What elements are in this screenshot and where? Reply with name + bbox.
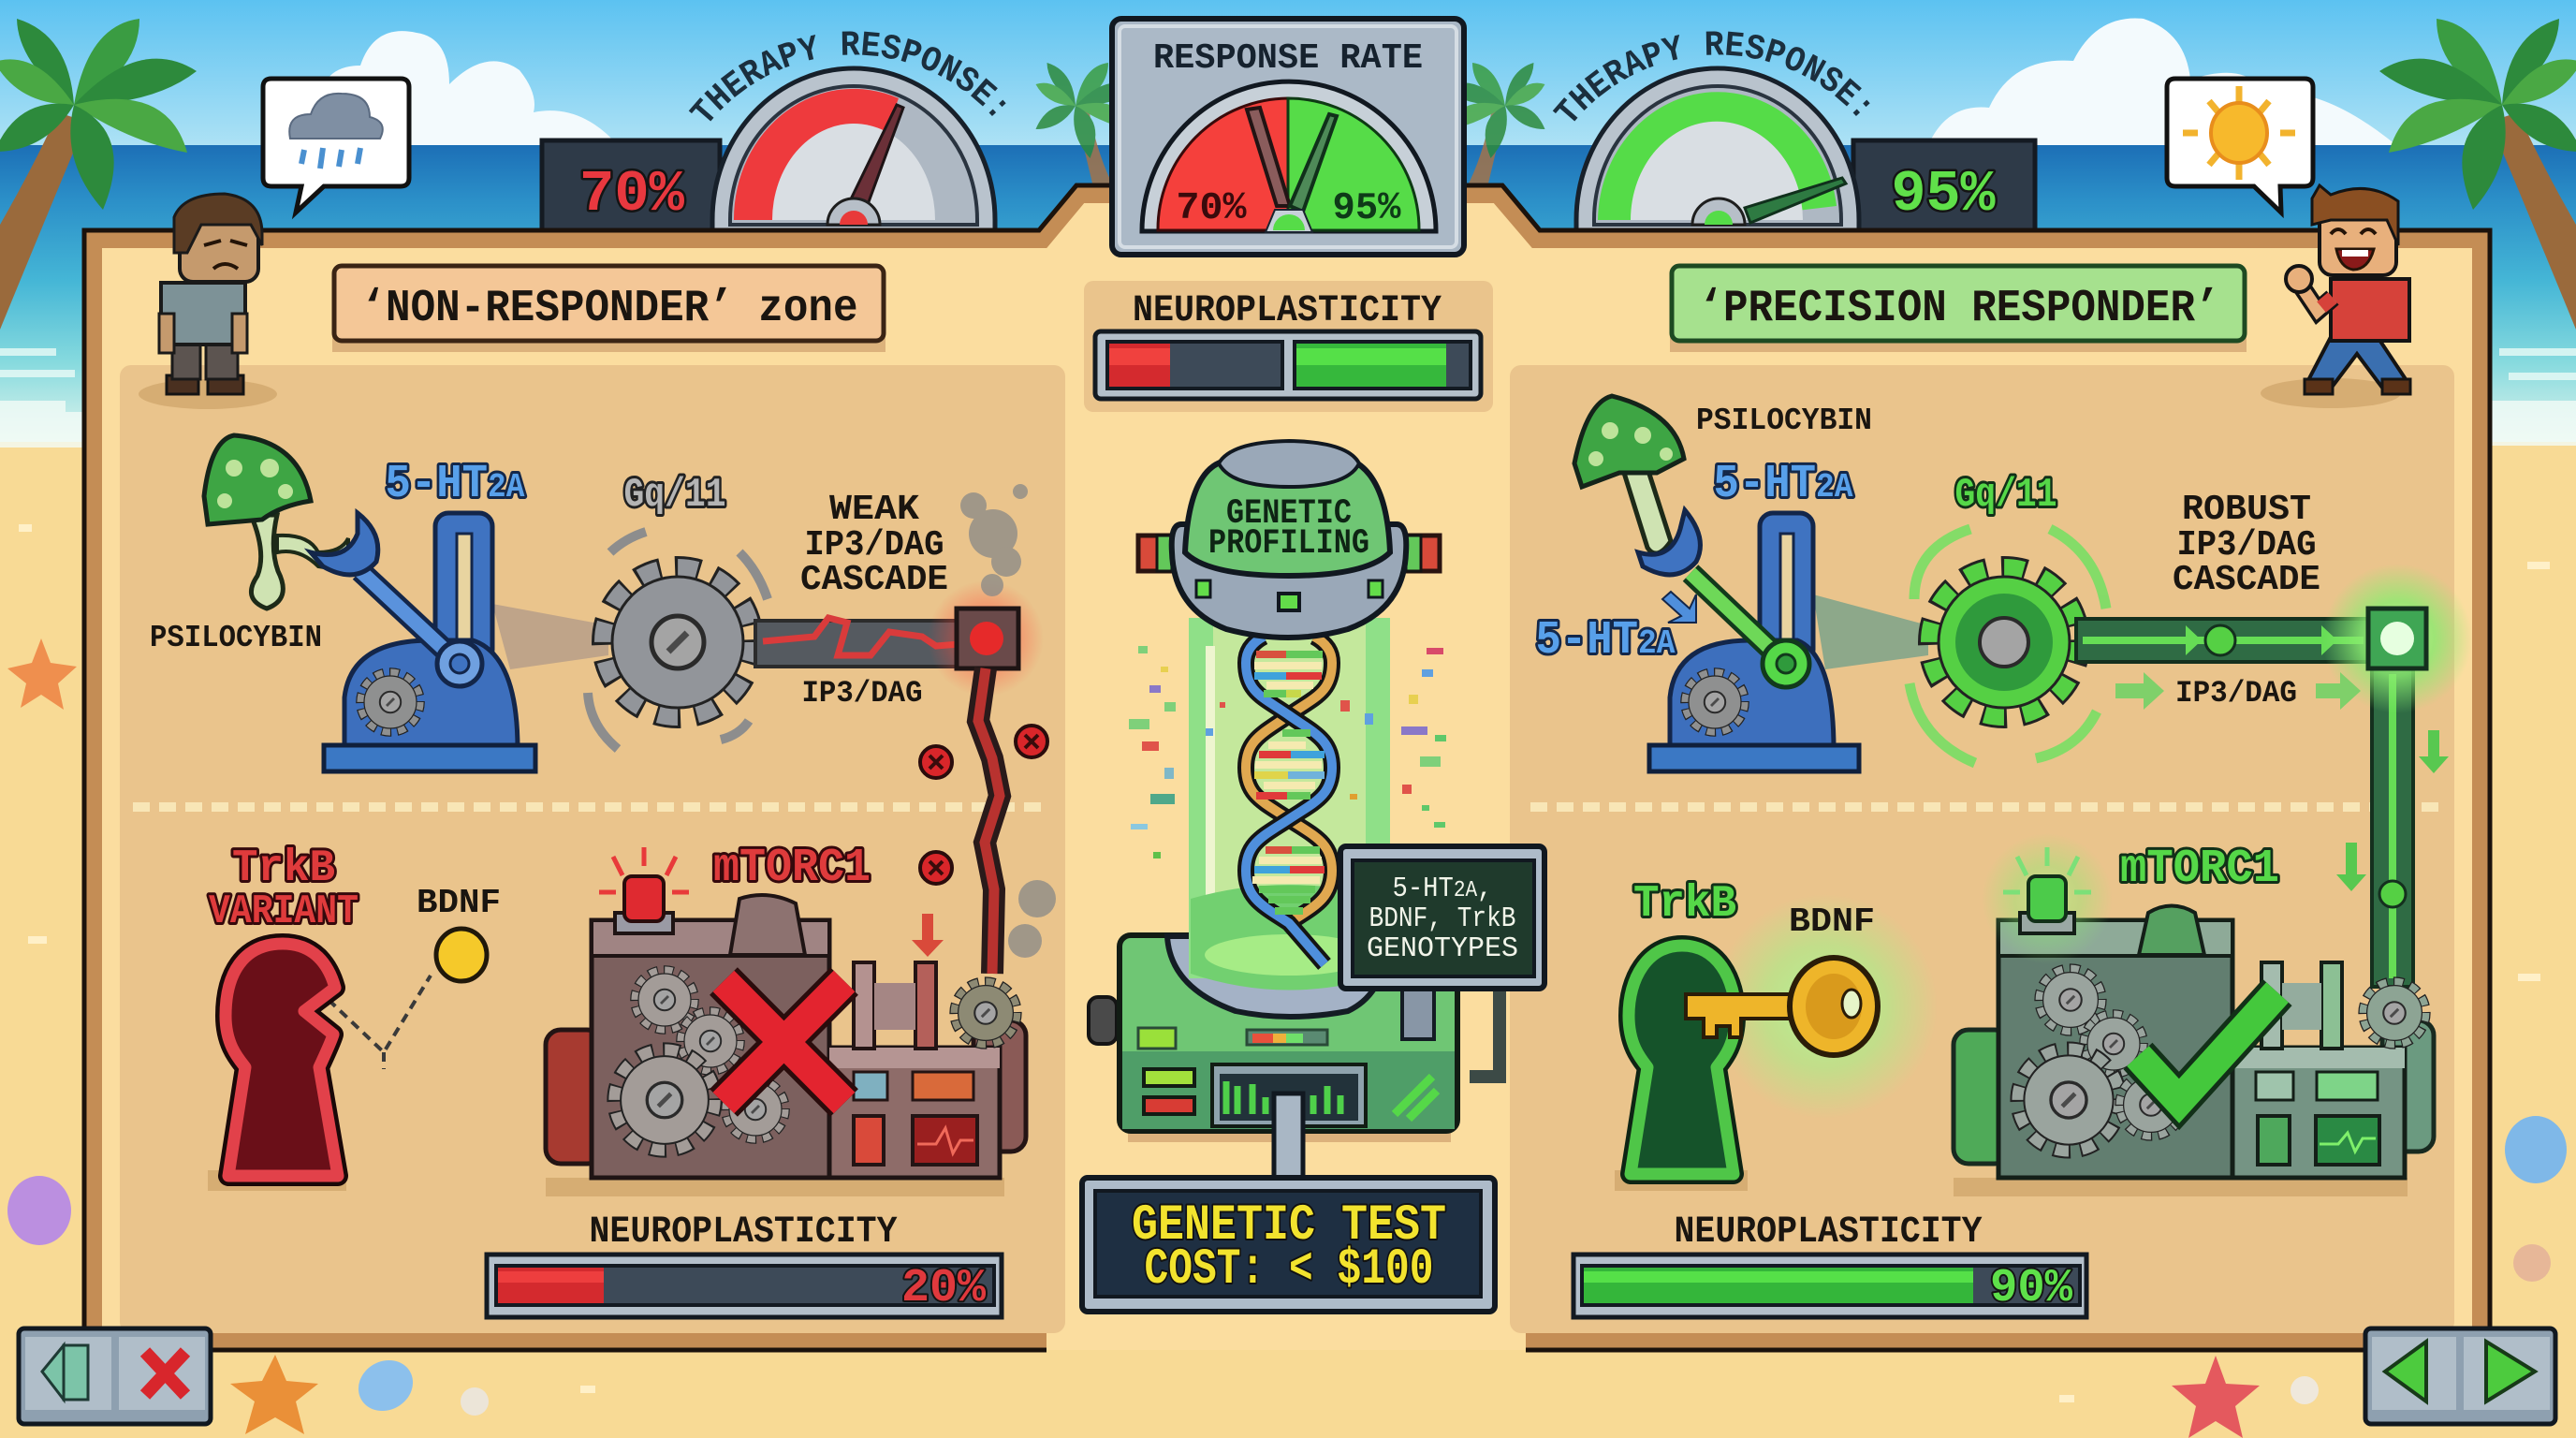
tube bowl	[1167, 936, 1387, 1017]
small palm left	[1035, 63, 1136, 187]
gauge left: therapy response 70%	[539, 32, 1006, 228]
small palm right	[1443, 63, 1544, 187]
neuroplasticity bar 90%: NEUROPLASTICITY	[1674, 1211, 1983, 1254]
shell blue	[349, 1350, 422, 1421]
label weak cascade	[800, 490, 948, 600]
shell blue right	[2505, 1116, 2567, 1183]
gear left	[588, 532, 768, 749]
genotype sign: BDNF, TrkB	[1368, 902, 1516, 935]
connector stem	[1274, 1093, 1303, 1180]
label mTORC1 left: mTORC1	[713, 842, 871, 895]
mushroom right	[1574, 396, 1684, 553]
neuroplasticity bar 90%: 90%	[1990, 1262, 2073, 1315]
label Gq/11 right: Gq/11	[1954, 472, 2057, 519]
lever machine left	[311, 513, 608, 771]
junction green	[2322, 564, 2472, 713]
robust cascade pipe	[2076, 619, 2370, 662]
label BDNF right: BDNF	[1789, 902, 1875, 941]
label robust cascade: CASCADE	[2173, 560, 2320, 600]
palm tree right	[2379, 19, 2576, 330]
label TrkB variant: TrkB	[232, 844, 335, 894]
arc title left: THERAPY RESPONSE:	[689, 32, 1006, 122]
label robust cascade: ROBUST	[2182, 490, 2311, 530]
lever machine right	[1638, 510, 1928, 771]
starfish red	[2172, 1356, 2260, 1438]
gear right	[1910, 529, 2106, 763]
genotype sign: GENOTYPES	[1367, 932, 1518, 965]
broken mTORC1 machine	[546, 847, 1026, 1196]
pebble	[461, 1387, 489, 1416]
clouds	[262, 19, 2396, 145]
tube	[1189, 618, 1390, 990]
navigation control panel	[2365, 1328, 2555, 1424]
neuroplasticity bar 20%: 20%	[901, 1262, 987, 1315]
sound button	[25, 1337, 111, 1410]
gauge right: therapy response 95%	[1552, 32, 2037, 228]
label psilocybin left: PSILOCYBIN	[150, 621, 322, 655]
palm tree left	[0, 19, 197, 330]
panel: precision responder	[1510, 365, 2472, 1333]
label TrkB variant	[209, 844, 359, 935]
label TrkB variant: VARIANT	[209, 888, 359, 935]
BDNF ball	[436, 929, 487, 981]
heading: precision responder: ‘PRECISION RESPONDER’	[1698, 284, 2220, 334]
label 5-HT2A right: 5-HT2A	[1713, 458, 1853, 511]
center gauge: response rate: RESPONSE RATE	[1153, 38, 1423, 79]
happy character	[2261, 185, 2410, 408]
dome top	[1138, 441, 1440, 638]
x dots	[920, 726, 1047, 884]
flow arrows	[2115, 672, 2361, 710]
genotype sign	[1340, 846, 1544, 989]
label psilocybin right: PSILOCYBIN	[1696, 404, 1872, 438]
value box 95%	[1853, 140, 2035, 232]
genotype sign: 5-HT2A,	[1393, 873, 1492, 905]
value box 95%: 95%	[1891, 161, 1996, 227]
genotype stand post	[1402, 983, 1434, 1039]
dome top: GENETIC	[1226, 494, 1352, 534]
bounce path	[329, 976, 431, 1069]
neuroplasticity bar 20%	[487, 1211, 1002, 1317]
genetic test cost sign	[1082, 1178, 1495, 1312]
arc title right: THERAPY RESPONSE:	[1552, 32, 1870, 122]
neuroplasticity bar 20%: NEUROPLASTICITY	[590, 1211, 897, 1254]
genetic test cost sign: COST: < $100	[1144, 1241, 1434, 1299]
down arrow red	[912, 914, 944, 957]
next button	[2464, 1337, 2550, 1410]
icon: sun	[2183, 86, 2295, 180]
label robust cascade	[2173, 490, 2320, 600]
big red X	[724, 981, 844, 1103]
sound control panel	[19, 1328, 211, 1424]
pebble right	[2291, 1376, 2319, 1404]
active mTORC1 machine	[1954, 833, 2434, 1196]
keyhole variant	[208, 944, 346, 1191]
center neuroplasticity comparison: NEUROPLASTICITY	[1133, 290, 1442, 332]
shell purple	[7, 1176, 71, 1245]
label 5-HT2A left: 5-HT2A	[386, 458, 525, 511]
center neuroplasticity comparison	[1084, 281, 1493, 412]
divider right	[1530, 802, 2441, 812]
label 5-HT2A second: 5-HT2A	[1535, 614, 1676, 668]
starfish bottom	[230, 1355, 318, 1434]
genetic test cost sign: GENETIC TEST	[1132, 1197, 1446, 1255]
label robust cascade: IP3/DAG	[2177, 525, 2316, 565]
mushroom left	[204, 435, 348, 609]
vertical pipe green	[2372, 668, 2413, 987]
junction red	[928, 580, 1044, 697]
weak cascade pipe	[755, 618, 960, 667]
label Gq/11 left: Gq/11	[623, 472, 726, 519]
label IP3/DAG left: IP3/DAG	[801, 676, 923, 711]
icon: rain cloud	[289, 94, 383, 169]
sad character	[139, 194, 277, 409]
smoke	[960, 484, 1056, 958]
siren green	[1982, 833, 2113, 964]
keyhole receptor	[1615, 946, 1748, 1191]
neuroplasticity bar 90%	[1573, 1211, 2086, 1317]
label mTORC1 right: mTORC1	[2120, 843, 2279, 896]
value box 70%	[542, 140, 720, 232]
label TrkB right: TrkB	[1633, 879, 1736, 930]
golden key	[1686, 958, 1878, 1055]
data particles	[1129, 646, 1446, 858]
label BDNF left: BDNF	[417, 884, 501, 922]
genetic profiling device	[1089, 441, 1500, 1142]
shell beige	[2513, 1244, 2551, 1282]
dome top: PROFILING	[1208, 524, 1369, 564]
broken wire core	[978, 668, 1000, 974]
key glow	[1713, 894, 1938, 1119]
label weak cascade: IP3/DAG	[805, 525, 944, 565]
heading: non-responder zone: ‘NON-RESPONDER’ zone	[361, 284, 857, 334]
panel: non-responder	[120, 365, 1065, 1333]
rain speech bubble	[263, 79, 409, 213]
label weak cascade: CASCADE	[800, 560, 948, 600]
divider	[133, 802, 1045, 812]
heading: precision responder	[1670, 266, 2247, 352]
value box 70%: 70%	[579, 161, 685, 227]
label IP3/DAG right: IP3/DAG	[2175, 676, 2297, 711]
siren red	[599, 847, 689, 933]
check mark	[2138, 992, 2277, 1101]
green down arrows	[2336, 730, 2449, 891]
heading: non-responder zone	[332, 266, 886, 352]
center gauge: response rate: 70%	[1176, 187, 1247, 230]
broken wire	[978, 668, 1000, 974]
device base	[1089, 935, 1500, 1142]
DNA helix	[1246, 637, 1332, 964]
mute button	[119, 1337, 205, 1410]
center gauge: response rate: 95%	[1333, 187, 1401, 230]
sun speech bubble	[2167, 79, 2313, 213]
main parchment frame	[84, 185, 2490, 1350]
starfish left	[7, 638, 77, 710]
prev button	[2372, 1337, 2456, 1410]
center gauge: response rate	[1112, 19, 1464, 255]
small blue arrow	[1662, 592, 1696, 623]
label weak cascade: WEAK	[829, 490, 919, 530]
